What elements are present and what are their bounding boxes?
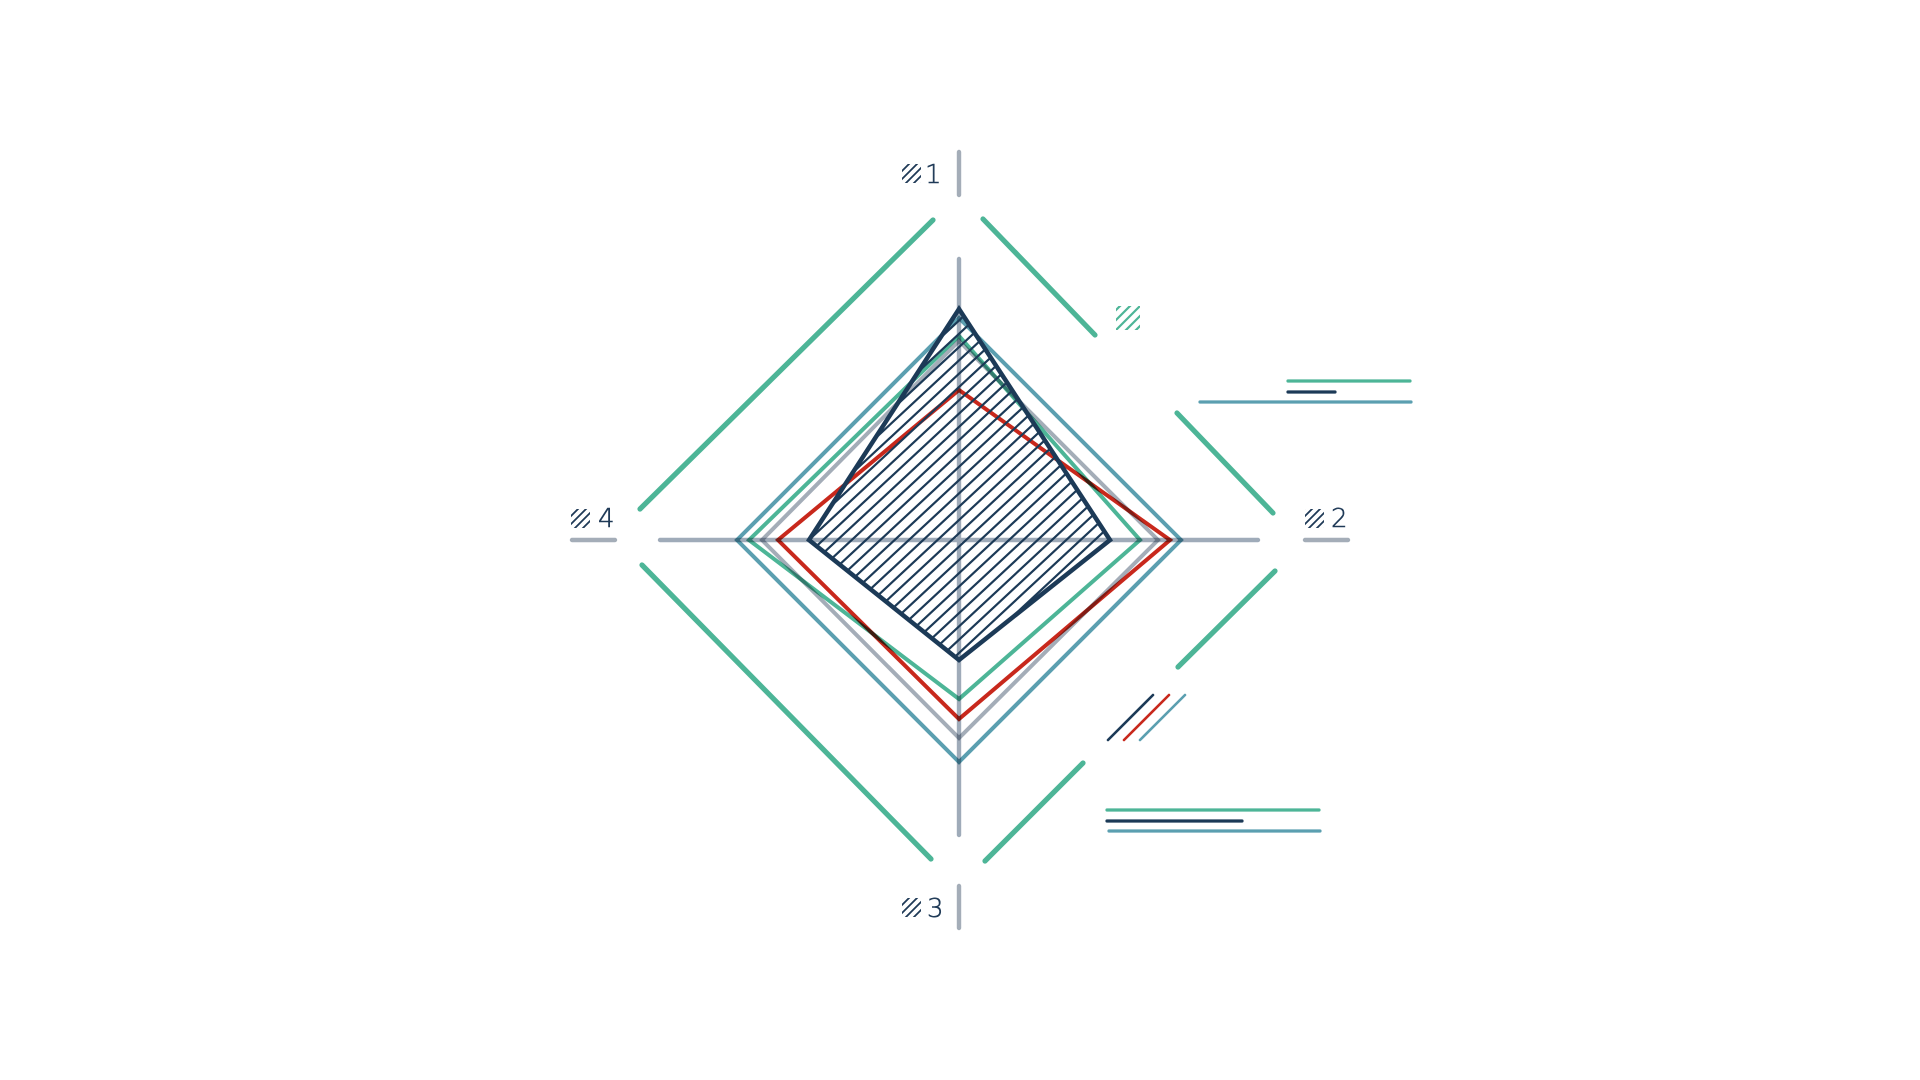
label 2 (1305, 508, 1346, 528)
legend lines: upper right (1200, 381, 1411, 402)
icon: hatch swatch 4 (571, 509, 590, 528)
radar infographic (570, 150, 1413, 930)
dark outline (809, 309, 1110, 660)
label 1: 1 (925, 160, 942, 190)
axis tick: bottom (957, 886, 961, 928)
hatch fill (813, 316, 1104, 656)
diagonal legend strokes (1108, 695, 1185, 740)
label 3 (902, 898, 942, 918)
icon: hatch swatch 1 (902, 164, 921, 183)
outer green frame segments (640, 219, 1275, 861)
label 1 (902, 164, 939, 184)
axis tick: right (1305, 538, 1348, 542)
icon: hatch swatch 2 (1305, 509, 1324, 528)
legend lines: lower right (1107, 810, 1320, 831)
axis tick: left (572, 538, 615, 542)
series polygon: blue (737, 318, 1181, 762)
series polygon: gray (762, 341, 1158, 738)
series polygon: green (749, 336, 1140, 699)
label 4: 4 (598, 504, 615, 534)
icon: green hatch swatch (1116, 306, 1140, 330)
label 3: 3 (927, 894, 944, 924)
series polygon: dark hatched (806, 305, 1113, 663)
axis lines (660, 259, 1258, 835)
series polygon: red (778, 390, 1170, 719)
label 4 (571, 508, 613, 528)
icon: hatch swatch 3 (902, 898, 921, 917)
axis tick: top (957, 152, 961, 195)
label 2: 2 (1331, 504, 1348, 534)
